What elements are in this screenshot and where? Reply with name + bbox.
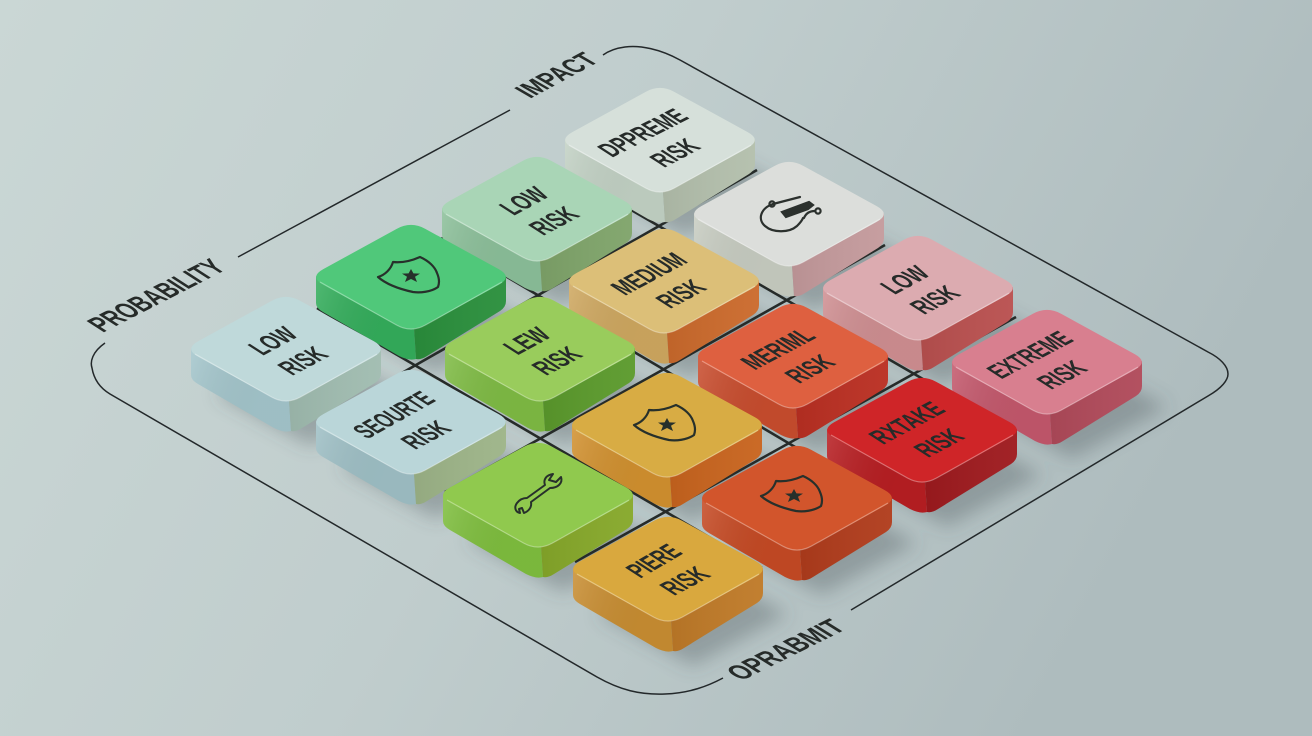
tile text: RISK [643,134,707,171]
tile text: RISK [394,416,458,453]
tile text [496,323,589,379]
icon: wrench [515,474,561,513]
tile text: RISK [649,275,713,312]
tile text: LOW [493,182,556,219]
tile text: RISK [903,281,967,318]
tile text: RISK [1030,356,1094,393]
tile: rxtake risk [827,378,1017,513]
tile text: RISK [907,424,971,461]
tile: low risk light green [442,157,632,292]
tile: shield orange [702,446,892,581]
tile text [604,248,713,312]
tile: piere risk [573,517,763,652]
tile: supreme risk [565,88,755,223]
tile text: MEDIUM [604,248,694,299]
tile text [874,261,967,318]
icon: shield [634,405,695,440]
grid lines under tiles [317,160,1016,568]
tile text: RXTAKE [862,398,952,448]
icon: shield [378,257,439,292]
outer rounded frame line [91,47,1228,694]
tile text [734,324,842,387]
tile text: SEOURTE [346,387,442,443]
tile text: LEW [496,323,558,359]
tile: wrench icon [443,443,633,578]
tile: purse icon [694,162,884,297]
axis label: opportunity: OPRABMIT [718,614,853,685]
tile: shield yellow [572,373,762,508]
tile text: LOW [874,261,937,298]
tile text: MERIML [734,324,822,374]
tile: lew risk [445,297,635,432]
tile text [493,182,586,239]
tile cast shadows [216,133,1167,666]
tile: extreme risk [952,310,1142,445]
tile text: RISK [778,350,842,387]
tile: medium risk [569,229,759,364]
axis label: probability: PROBABILITY [81,255,233,337]
icon: purse [761,197,821,231]
tile: low risk pink [823,236,1013,371]
icon: shield [761,476,822,511]
tile text [242,322,335,379]
tile: meriml risk [698,304,888,439]
tile text: RISK [522,202,586,239]
tile: shield green [316,225,506,360]
tile: low risk blue [191,297,381,432]
tile text: RISK [653,562,717,599]
tile text: RISK [271,342,335,379]
tile: secure risk [316,370,506,505]
tile text: RISK [525,342,589,379]
tile text: EXTREME [980,327,1080,383]
tile text [619,540,717,599]
tile text: DPPREME [591,105,695,161]
axis label: impact: IMPACT [508,48,606,102]
tile text: LOW [242,322,305,359]
tile text [862,398,971,461]
tile text: PIERE [619,540,689,582]
